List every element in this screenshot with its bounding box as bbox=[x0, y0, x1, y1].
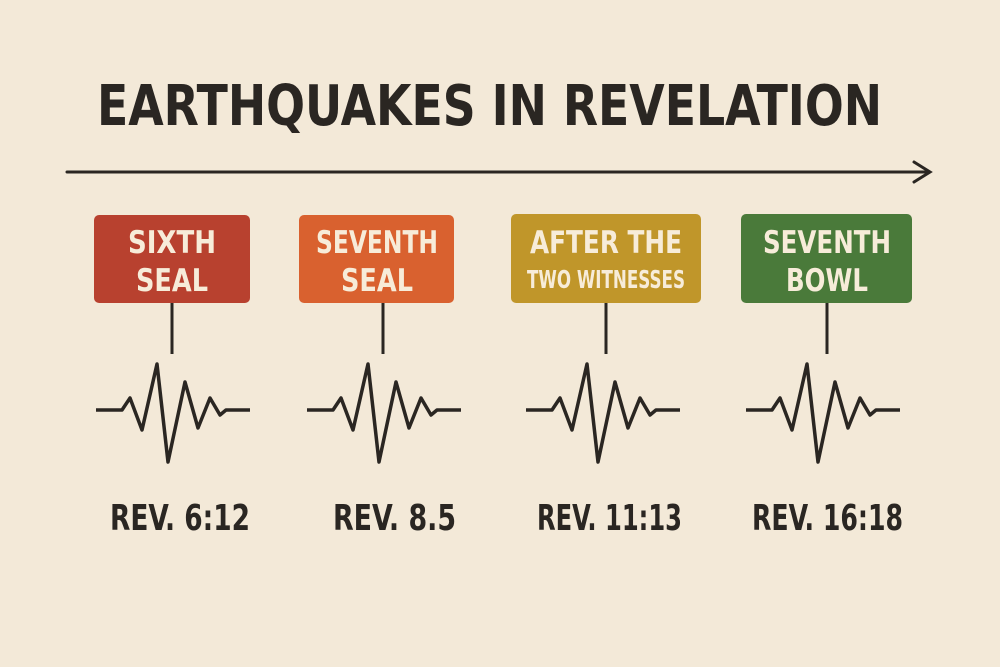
panel: seventh seal: REV. 8.5 bbox=[333, 498, 456, 539]
panel: after the two witnesses bbox=[511, 214, 701, 539]
panel: seventh bowl: SEVENTH bbox=[763, 225, 891, 261]
panel: seventh seal bbox=[299, 215, 461, 539]
panel: sixth seal: SEAL bbox=[136, 263, 208, 299]
panel: seventh bowl: REV. 16:18 bbox=[752, 498, 903, 539]
panel: after the two witnesses: TWO WITNESSES bbox=[527, 265, 685, 294]
panel: seventh bowl: BOWL bbox=[786, 263, 868, 299]
panel: sixth seal: SIXTH bbox=[128, 225, 216, 261]
panel: after the two witnesses: AFTER THE bbox=[530, 225, 682, 261]
panel: after the two witnesses: REV. 11:13 bbox=[537, 498, 682, 539]
panel: seventh bowl bbox=[741, 214, 912, 539]
arrow: timeline bbox=[67, 162, 930, 182]
panel: seventh seal: SEVENTH bbox=[316, 225, 438, 261]
panel: sixth seal: REV. 6:12 bbox=[110, 498, 250, 539]
panel: seventh seal: SEAL bbox=[341, 263, 413, 299]
panel: sixth seal bbox=[94, 215, 250, 539]
title: EARTHQUAKES IN REVELATION bbox=[97, 74, 882, 139]
